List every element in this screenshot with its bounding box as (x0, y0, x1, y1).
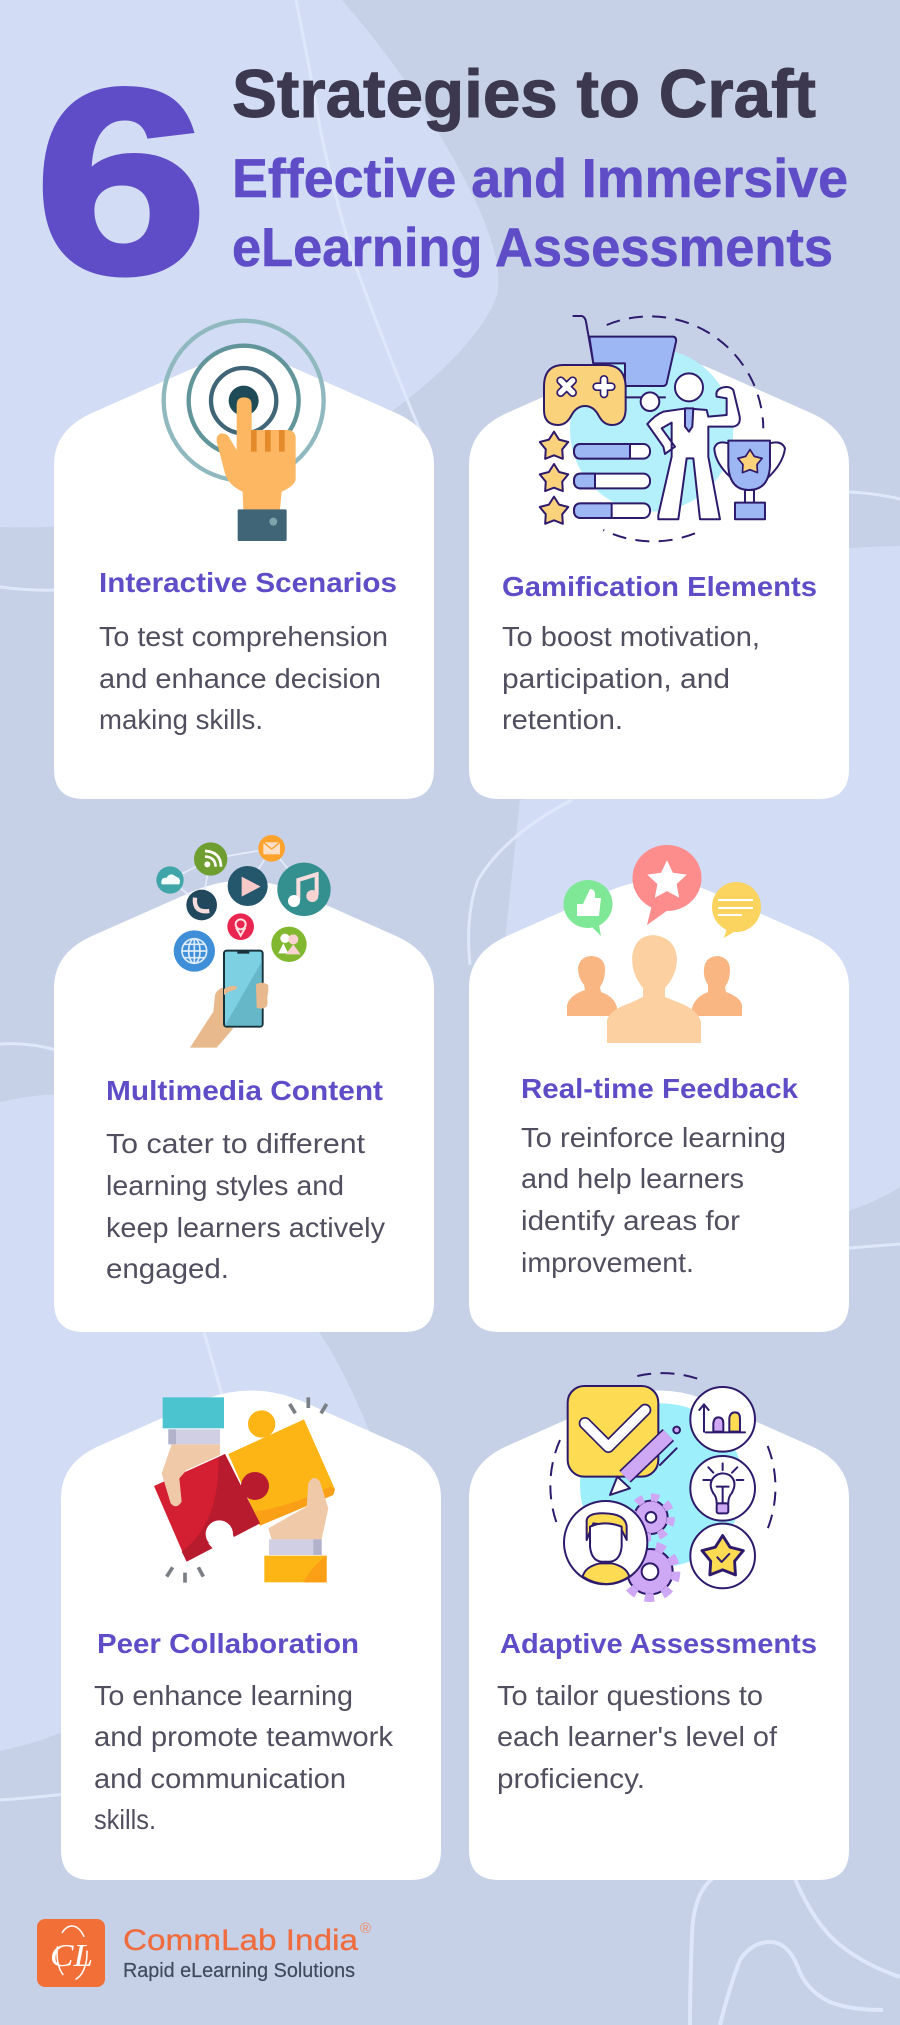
brand name: CommLab India (123, 1924, 358, 1957)
description: and enhance decision (99, 663, 381, 694)
description: each learner's level of (497, 1721, 777, 1752)
card shape (469, 358, 849, 799)
description: proficiency. (497, 1763, 645, 1794)
title line 2: Effective and Immersive (232, 147, 848, 209)
description: To enhance learning (94, 1680, 353, 1711)
icon: checklist, pen, gears and learner (550, 1373, 775, 1598)
logo badge (37, 1919, 105, 1987)
panel: adaptive assessments (469, 1373, 849, 1880)
title line 1: Strategies to Craft (232, 56, 816, 132)
description: To boost motivation, (502, 621, 760, 652)
description: skills. (94, 1804, 156, 1835)
description (497, 1680, 777, 1794)
description: To reinforce learning (521, 1122, 786, 1153)
panel: multimedia content (54, 835, 434, 1332)
heading: Peer Collaboration (97, 1628, 359, 1659)
heading: Real-time Feedback (521, 1073, 798, 1104)
registered mark: ® (360, 1920, 371, 1937)
description: To cater to different (106, 1128, 365, 1159)
panel: gamification elements (469, 316, 849, 799)
description: making skills. (99, 704, 263, 735)
panel: interactive scenarios (54, 321, 434, 799)
card shape (54, 880, 434, 1332)
icon: touch target hand (164, 321, 324, 541)
card shape (61, 1390, 441, 1880)
logo: CommLab India (37, 1919, 371, 1987)
description: improvement. (521, 1247, 694, 1278)
heading: Multimedia Content (106, 1075, 383, 1106)
heading: Adaptive Assessments (500, 1628, 817, 1659)
icon: phone with media bubbles (156, 835, 331, 1048)
description: To tailor questions to (497, 1680, 763, 1711)
description: and communication (94, 1763, 346, 1794)
icon: puzzle hands (154, 1397, 335, 1583)
panel: peer collaboration (61, 1390, 441, 1880)
title (35, 35, 848, 328)
card shape (54, 358, 434, 799)
description (94, 1680, 394, 1835)
heading: Interactive Scenarios (99, 567, 397, 598)
description: identify areas for (521, 1205, 740, 1236)
logo badge: CL (50, 1937, 93, 1973)
description: retention. (502, 704, 623, 735)
description: learning styles and (106, 1170, 344, 1201)
icon: feedback bubbles and people (564, 845, 761, 1043)
title line 3: eLearning Assessments (232, 216, 833, 278)
description: and promote teamwork (94, 1721, 394, 1752)
description: participation, and (502, 663, 730, 694)
card shape (469, 1390, 849, 1880)
heading: Gamification Elements (502, 571, 817, 602)
description (106, 1128, 385, 1284)
description: To test comprehension (99, 621, 388, 652)
description: engaged. (106, 1253, 229, 1284)
big numeral 6: 6 (35, 35, 207, 328)
icon: game, trophy and player (540, 316, 785, 541)
description: and help learners (521, 1163, 744, 1194)
description (99, 621, 388, 735)
description (521, 1122, 786, 1278)
card shape (469, 880, 849, 1332)
description (502, 621, 760, 735)
panel: real-time feedback (469, 845, 849, 1332)
tagline: Rapid eLearning Solutions (123, 1960, 355, 1982)
description: keep learners actively (106, 1212, 385, 1243)
